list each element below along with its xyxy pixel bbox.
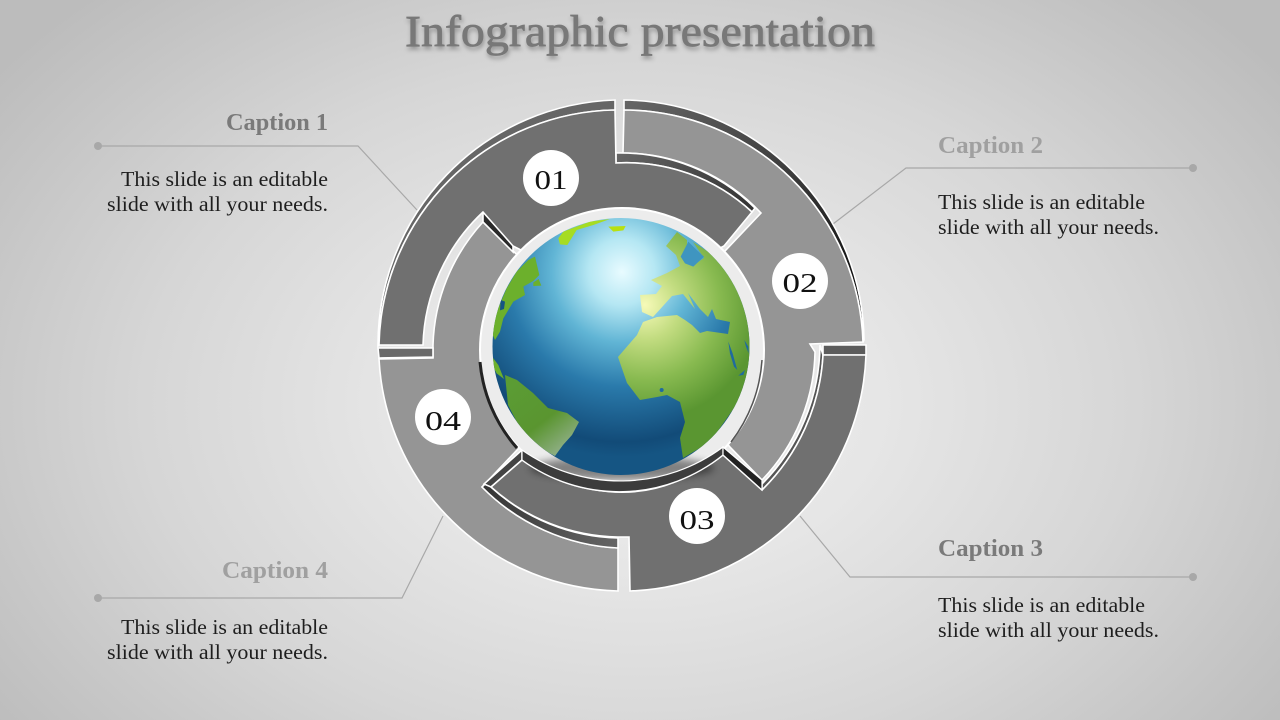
- badge 03: [669, 488, 725, 544]
- North America: [492, 257, 541, 379]
- segment 1: [378, 100, 755, 346]
- badge 04: 04: [425, 406, 462, 436]
- segment 3: [482, 345, 866, 591]
- leader line: caption 3: [800, 516, 1197, 581]
- caption 1: slide with all your needs.: [107, 192, 328, 216]
- circular arrow ring: [378, 100, 866, 591]
- caption 1: This slide is an editable: [121, 167, 328, 191]
- seas: [660, 242, 749, 392]
- caption 2: Caption 2: [938, 133, 1043, 159]
- caption 2: This slide is an editable: [938, 190, 1145, 214]
- leader line: caption 4: [94, 516, 443, 602]
- caption 4: slide with all your needs.: [107, 640, 328, 664]
- leader line: caption 2: [833, 164, 1197, 224]
- segment 4: [378, 212, 620, 591]
- caption 2: slide with all your needs.: [938, 215, 1159, 239]
- leader line: caption 1: [94, 142, 417, 210]
- caption 1: Caption 1: [226, 110, 328, 136]
- segment 2: [623, 100, 864, 480]
- caption 3: slide with all your needs.: [938, 618, 1159, 642]
- central disk: [480, 208, 764, 492]
- caption 4: This slide is an editable: [121, 615, 328, 639]
- title: Infographic presentation: [405, 7, 875, 56]
- inner edge shadows: [480, 360, 762, 492]
- badge 01: [523, 150, 579, 206]
- globe: [492, 218, 755, 475]
- caption 4: Caption 4: [222, 558, 328, 584]
- caption 4: [107, 558, 328, 664]
- globe shadow: [530, 456, 714, 480]
- caption 1: [107, 110, 328, 216]
- badge 04: [415, 389, 471, 445]
- continents: [492, 219, 755, 458]
- badge 01: 01: [534, 165, 568, 195]
- Greenland: [558, 219, 610, 245]
- badge 02: [772, 253, 828, 309]
- caption 3: Caption 3: [938, 536, 1043, 562]
- Europe, Africa and Asia: [618, 232, 755, 458]
- Iceland: [608, 226, 626, 232]
- lake: [500, 300, 505, 310]
- caption 3: This slide is an editable: [938, 593, 1145, 617]
- badge 03: 03: [680, 505, 714, 535]
- South America: [505, 375, 579, 456]
- caption 2: [938, 133, 1159, 239]
- badge 02: 02: [782, 268, 818, 298]
- caption 3: [938, 536, 1159, 642]
